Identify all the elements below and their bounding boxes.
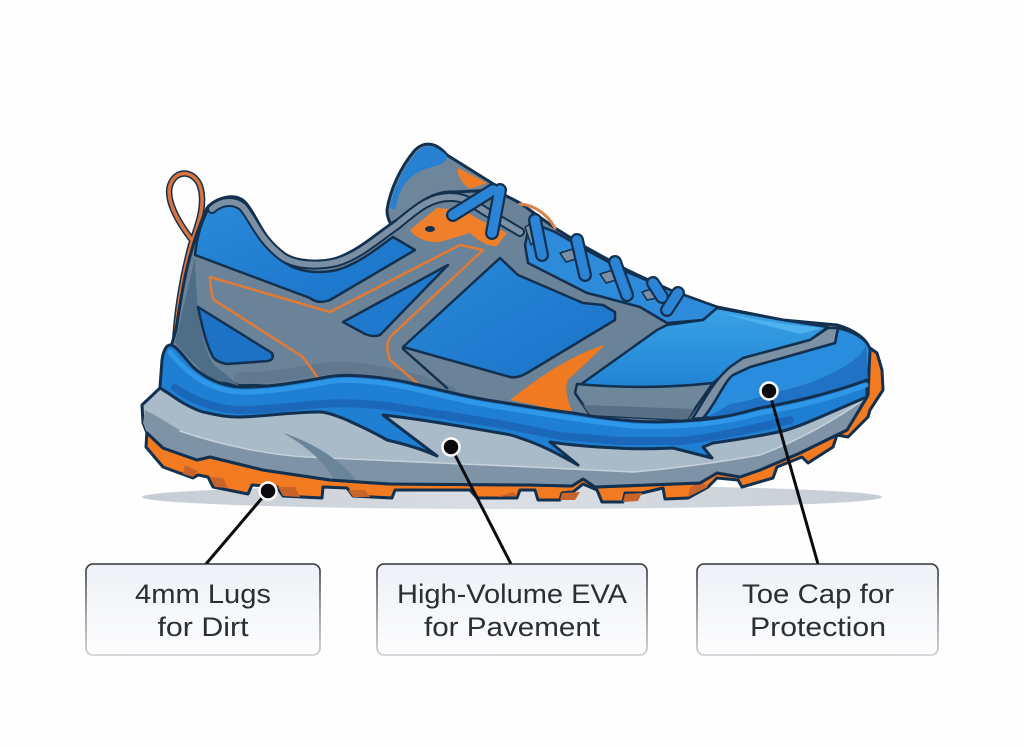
label box: high-volume EVA — [377, 564, 647, 655]
eyestay grey stitching rows — [525, 223, 657, 300]
callout: toe cap leader — [760, 382, 818, 564]
callout: EVA leader — [442, 438, 511, 564]
upper base — [170, 190, 870, 430]
midsole bottom line — [147, 397, 867, 487]
collar edge band — [212, 197, 520, 265]
lace saddle orange patch — [410, 208, 507, 246]
heel blue panel — [195, 202, 415, 302]
midsole lower shade — [143, 398, 866, 487]
toe main blue panel — [580, 308, 828, 387]
midsole highlight — [180, 398, 866, 472]
outsole orange with lugs — [146, 348, 883, 502]
lug shading — [183, 465, 708, 502]
heel lower blue panel — [198, 307, 273, 364]
label box: high-volume EVA: for Pavement — [424, 612, 601, 642]
side blue panel — [343, 265, 448, 336]
heel pull loop — [169, 173, 202, 343]
orange side triangle — [510, 345, 605, 413]
orange lace-edge arc — [520, 204, 555, 228]
label box: 4mm lugs — [86, 564, 320, 655]
eyestay blue panel — [525, 222, 720, 323]
label box: toe cap: Toe Cap for — [742, 579, 894, 609]
blue midsole band — [160, 345, 867, 465]
midsole swoosh crease — [283, 433, 357, 482]
label box: 4mm lugs: for Dirt — [158, 612, 249, 642]
ground shadow — [142, 485, 882, 509]
label box: 4mm lugs: 4mm Lugs — [135, 579, 271, 609]
orange piping lines — [210, 245, 483, 383]
label box: toe cap: Protection — [750, 612, 886, 642]
vamp grey dark band — [575, 383, 713, 420]
lower quarter seam — [403, 349, 447, 388]
dark shade above band — [240, 368, 450, 392]
callout: lugs leader — [206, 482, 276, 564]
label box: toe cap — [697, 564, 938, 655]
laces — [453, 190, 678, 310]
illustration: trail running shoe — [142, 144, 883, 502]
toe cap with grey band — [692, 328, 870, 419]
heel counter — [175, 257, 240, 386]
midsole grey — [142, 385, 867, 487]
label box: high-volume EVA: High-Volume EVA — [397, 579, 627, 609]
tongue — [387, 144, 495, 235]
quarter main blue panel — [403, 258, 615, 377]
